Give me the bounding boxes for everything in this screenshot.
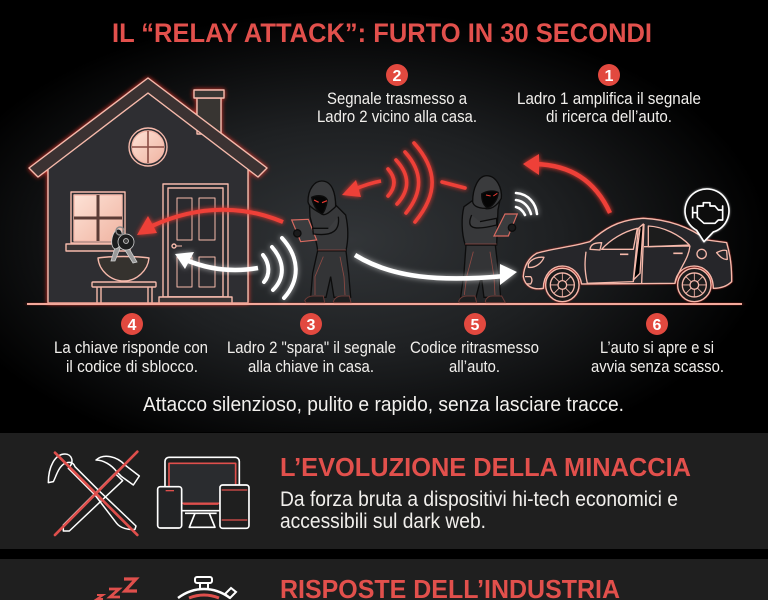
step 1 caption (517, 64, 701, 126)
step 3 caption (227, 313, 396, 376)
panel: industry responses (0, 559, 768, 600)
thief 1 (459, 176, 517, 303)
panel: evolution of the threat (0, 433, 768, 549)
step 1 caption: di ricerca dell’auto. (546, 108, 672, 126)
step 3 caption: 3 (307, 317, 316, 334)
step 1 caption: Ladro 1 amplifica il segnale (517, 90, 701, 108)
roof (29, 78, 267, 177)
icon: devices (158, 457, 249, 528)
icon: sleep z (97, 579, 137, 599)
step 4 caption: La chiave risponde con (54, 339, 208, 357)
step 2 caption: 2 (393, 68, 402, 85)
step 1 caption: 1 (605, 68, 614, 85)
house (29, 78, 267, 303)
step 6 caption: L’auto si apre e si (600, 339, 714, 357)
description: evolution: accessibili sul dark web. (280, 510, 486, 533)
white signal arcs (263, 238, 296, 298)
square window (66, 192, 130, 251)
icon: crossed-out tools (48, 452, 139, 535)
step 3 caption: Ladro 2 "spara" il segnale (227, 339, 396, 357)
step 3 caption: alla chiave in casa. (248, 358, 374, 376)
step 2 caption (317, 64, 477, 126)
car (523, 218, 732, 302)
step 4 caption (54, 313, 208, 376)
keys (110, 227, 137, 263)
table (92, 282, 156, 303)
ground line (27, 303, 742, 305)
white arrow to keys (175, 252, 258, 270)
bowl (98, 256, 149, 281)
step 6 caption: 6 (653, 317, 662, 334)
step 4 caption: 4 (128, 317, 137, 334)
round window (129, 128, 167, 166)
white arrow to car (355, 255, 517, 285)
step 6 caption: avvia senza scasso. (591, 358, 724, 376)
chimney (194, 90, 224, 134)
step 5 caption (410, 313, 539, 376)
step 5 caption: 5 (471, 317, 480, 334)
house wall (48, 93, 248, 303)
step 2 caption: Ladro 2 vicino alla casa. (317, 108, 477, 126)
step 5 caption: all’auto. (449, 358, 500, 376)
step 5 caption: Codice ritrasmesso (410, 339, 539, 357)
red signal arcs (388, 143, 432, 222)
heading: evolution: L’EVOLUZIONE DELLA MINACCIA (280, 452, 691, 482)
white small wifi (516, 193, 537, 215)
background (0, 0, 768, 432)
red arrow to thief 2 (342, 180, 465, 197)
red arrow from car (523, 154, 610, 213)
thief 2 (292, 181, 351, 303)
engine warning bubble (685, 189, 729, 242)
summary line: Attacco silenzioso, pulito e rapido, senza lasciare tracce. (143, 393, 624, 416)
red arrow to keys (137, 210, 283, 235)
step 6 caption (591, 313, 724, 376)
step 2 caption: Segnale trasmesso a (327, 90, 468, 108)
door (159, 184, 232, 303)
title: IL “RELAY ATTACK”: FURTO IN 30 SECONDI (112, 18, 652, 48)
step 4 caption: il codice di sblocco. (66, 358, 198, 376)
icon: stopwatch (178, 577, 236, 598)
description: evolution: Da forza bruta a dispositivi hi-tech economici e (280, 488, 678, 511)
description: evolution (280, 488, 678, 533)
